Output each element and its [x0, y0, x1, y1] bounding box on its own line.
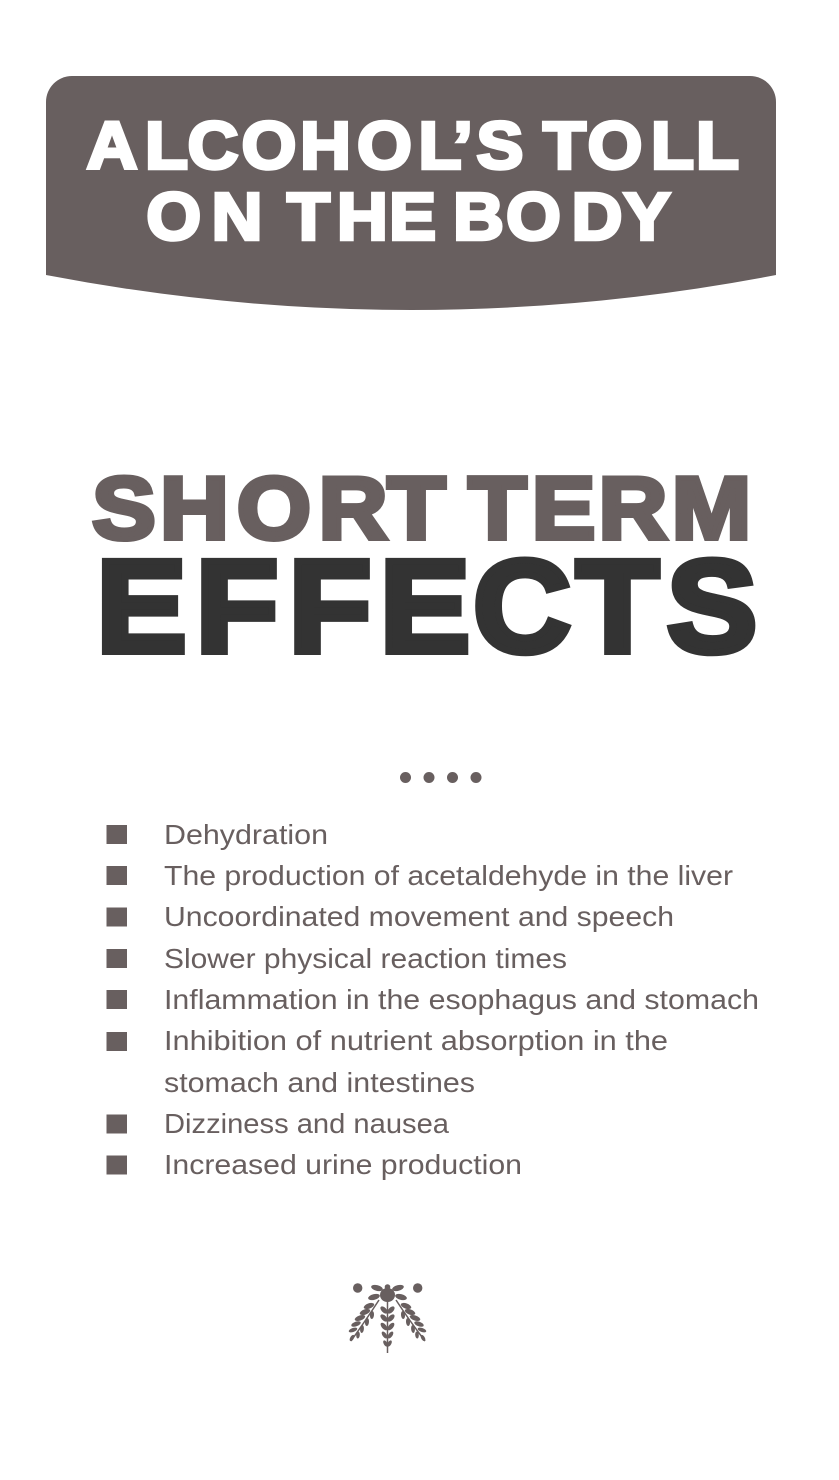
title: ALCOHOL’S TOLL	[87, 108, 739, 183]
banner	[46, 76, 776, 310]
heading: short term: SHORT TERM	[92, 460, 751, 558]
list text: Inhibition of nutrient absorption in the	[164, 1025, 668, 1056]
list text: Increased urine production	[164, 1149, 522, 1180]
list of short term effects	[106, 819, 759, 1180]
list text	[164, 819, 759, 1180]
heading: effects: EFFECTS	[97, 534, 757, 680]
title	[87, 108, 739, 254]
list text: Dizziness and nausea	[164, 1108, 450, 1139]
title: ON THE BODY	[146, 179, 670, 254]
list text: Dehydration	[164, 819, 328, 850]
icon: botanical sprigs	[348, 1283, 427, 1353]
list text: Inflammation in the esophagus and stomach	[164, 984, 759, 1015]
list text: Slower physical reaction times	[164, 943, 567, 974]
dots divider	[400, 772, 482, 783]
list text: stomach and intestines	[164, 1067, 475, 1098]
list text: Uncoordinated movement and speech	[164, 901, 674, 932]
list text: The production of acetaldehyde in the liver	[164, 860, 733, 891]
bullet items	[106, 825, 127, 1174]
